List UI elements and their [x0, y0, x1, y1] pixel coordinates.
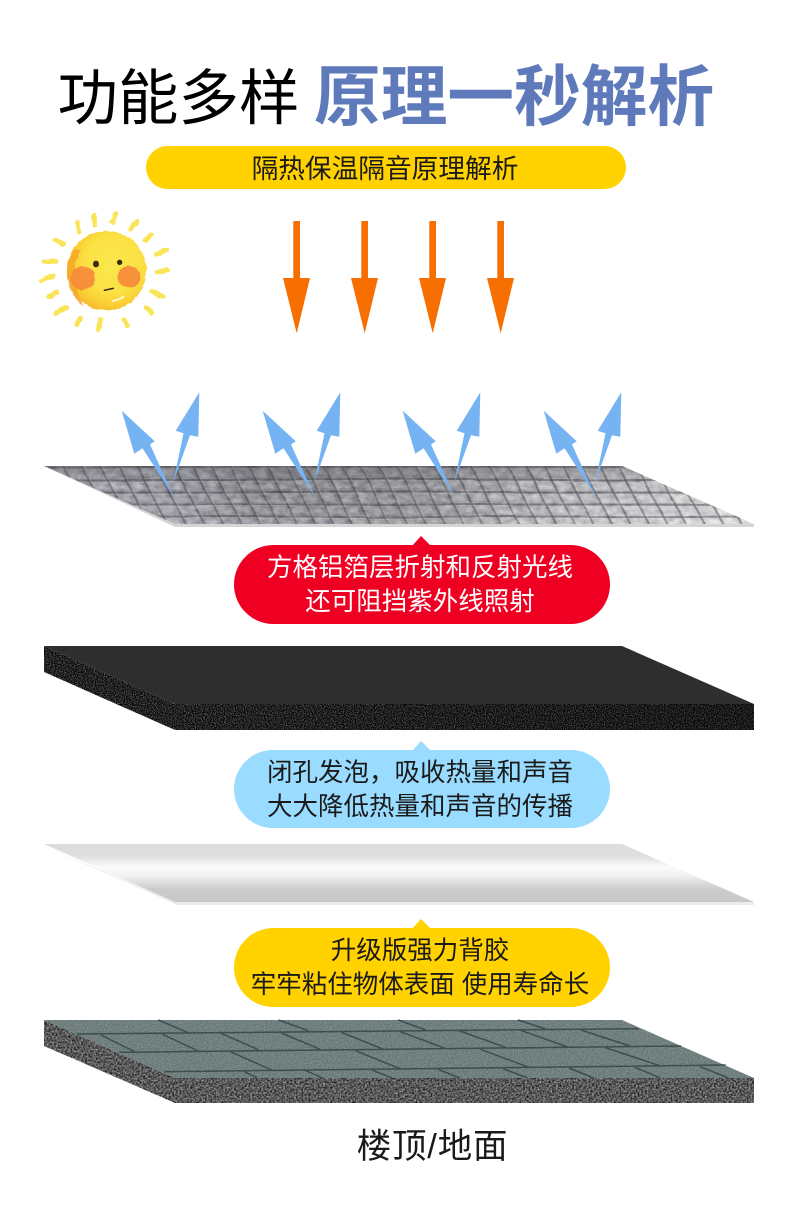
- callout: foam: 闭孔发泡，吸收热量和声音: [267, 759, 573, 787]
- callout: adhesive: 牢牢粘住物体表面 使用寿命长: [251, 971, 589, 999]
- callout: foil: 方格铝箔层折射和反射光线: [267, 554, 573, 582]
- callout: foam: [234, 741, 610, 828]
- subtitle pill: [146, 146, 626, 189]
- callout: foil: [234, 536, 610, 624]
- layer: black foam: [44, 646, 754, 730]
- blue reflected arrows: [122, 392, 621, 497]
- orange heat arrows: [283, 221, 514, 333]
- callout: adhesive: [234, 919, 610, 1007]
- layer: roof ground: [44, 1020, 754, 1103]
- callout: foil: 还可阻挡紫外线照射: [305, 588, 535, 616]
- layer: adhesive film: [44, 844, 754, 905]
- icon: sun: [41, 213, 167, 329]
- callout: foam: 大大降低热量和声音的传播: [267, 793, 573, 821]
- title: 功能多样: [58, 64, 300, 132]
- layer: aluminium foil: [44, 466, 754, 527]
- title: [58, 61, 714, 135]
- callout: adhesive: 升级版强力背胶: [331, 937, 509, 965]
- label: roof / ground: 楼顶/地面: [357, 1128, 508, 1166]
- subtitle pill: 隔热保温隔音原理解析: [252, 154, 518, 184]
- title: 原理一秒解析: [314, 61, 714, 135]
